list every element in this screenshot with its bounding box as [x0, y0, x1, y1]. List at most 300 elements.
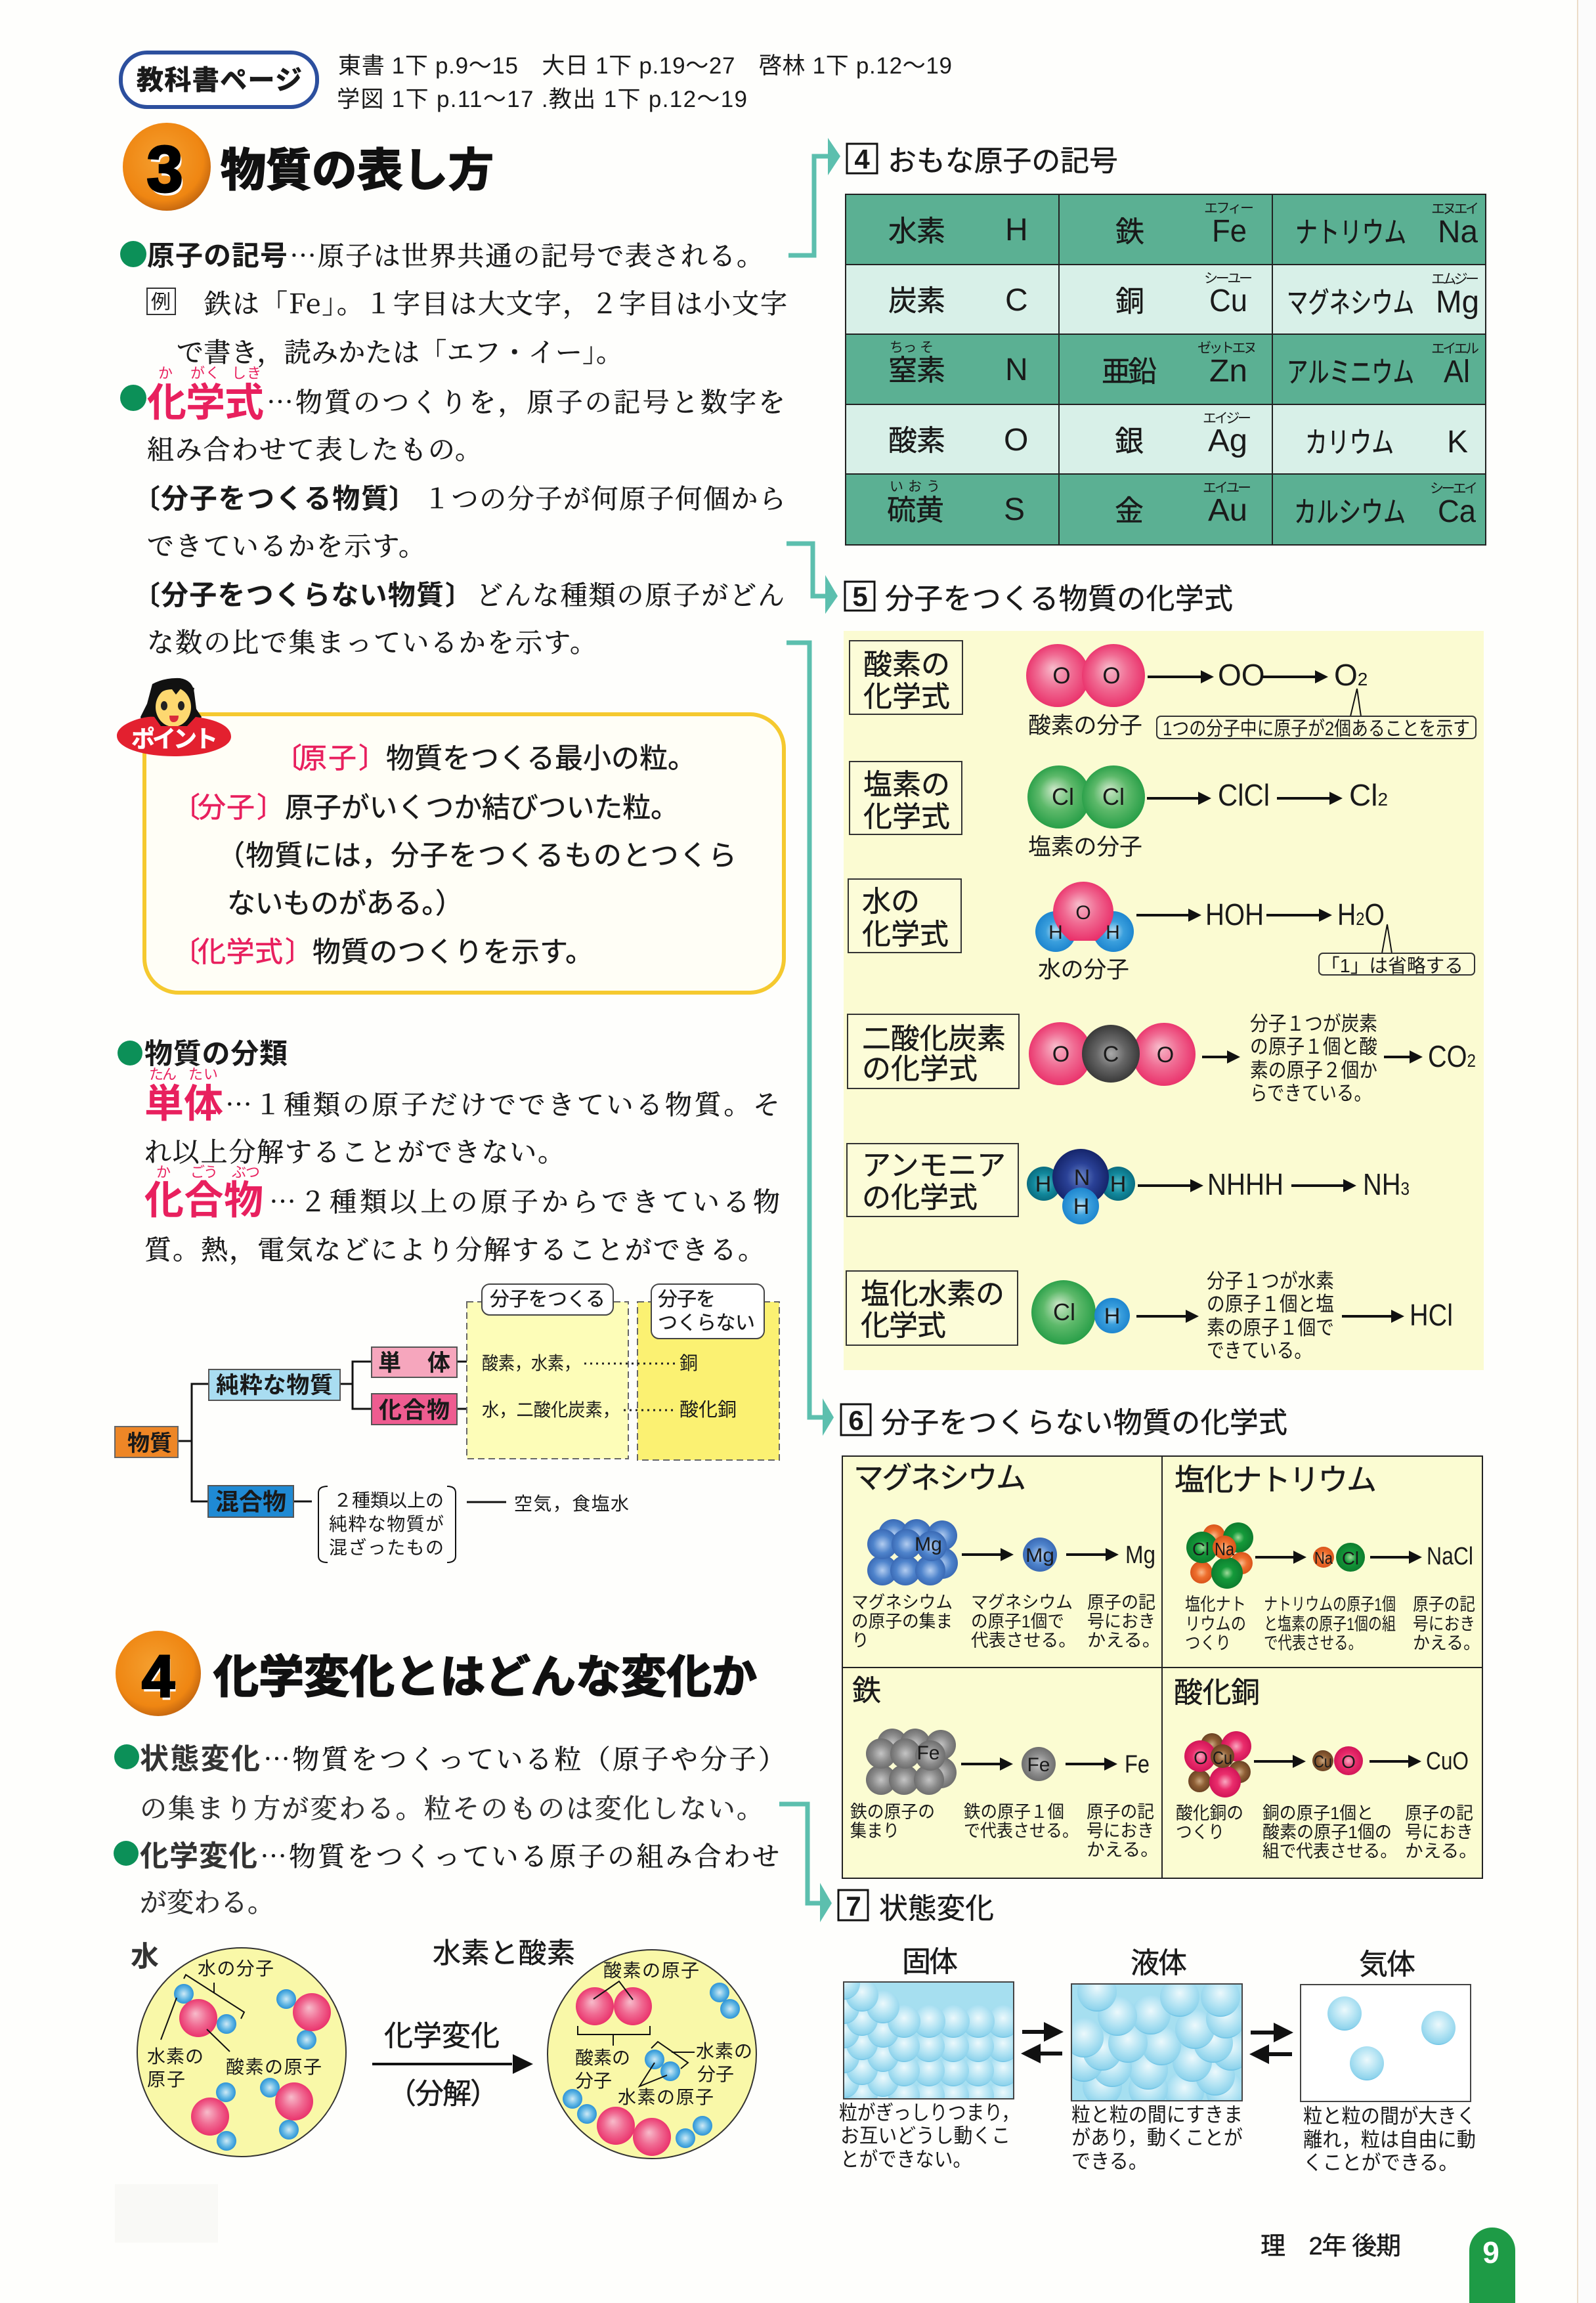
- cell: iron: [850, 1675, 1159, 1860]
- row: hydrogen chloride: 塩化水素の: [861, 1278, 1004, 1310]
- cell: magnesium: 号におき: [1087, 1612, 1155, 1631]
- row: hydrogen chloride: 素の原子１個で: [1207, 1316, 1334, 1339]
- text: chemical formula: 〕: [389, 484, 416, 514]
- row: water: O: [1075, 902, 1091, 924]
- column: non-metals: 酸素: [888, 425, 945, 457]
- heading 7: state change: [838, 1890, 994, 1925]
- text: chemical formula: しき: [232, 365, 261, 381]
- classification tree diagram: 銅: [679, 1353, 698, 1373]
- column: non-metals: H: [1005, 213, 1028, 248]
- arrow: to section 4 table: [788, 138, 840, 255]
- text: classification of matter: 化合物: [144, 1178, 263, 1222]
- box: compound: 化合物: [379, 1398, 450, 1423]
- text: state change and chemical change: が変わる。: [140, 1881, 274, 1920]
- table: atomic symbols: [846, 194, 1486, 545]
- heading 7: state change: 状態変化: [879, 1893, 994, 1925]
- diagram: water circle: 水素の: [147, 2046, 204, 2067]
- diagram: liquid: [1064, 1947, 1251, 2173]
- label: hydrogen and oxygen: 水素と酸素: [433, 1938, 575, 1969]
- box: mixture: 混合物: [215, 1488, 286, 1515]
- cell: sodium chloride: Na: [1215, 1539, 1234, 1559]
- diagram: hydrogen and oxygen circle: [548, 1950, 756, 2159]
- text: classification of matter: か: [156, 1164, 171, 1180]
- column: non-metals: C: [1005, 283, 1028, 318]
- diagram: hydrogen and oxygen circle: 酸素の: [575, 2048, 630, 2068]
- column: metals: Cu: [1209, 284, 1247, 318]
- cell: copper oxide: 組で代表させる。: [1262, 1841, 1397, 1861]
- row: oxygen: O: [1102, 663, 1121, 689]
- row: water: 水の: [862, 886, 920, 918]
- point callout box: 分子: [198, 792, 255, 824]
- cell: copper oxide: 酸化銅の: [1176, 1803, 1243, 1823]
- section 3 heading: 3: [146, 133, 183, 206]
- box: matter: [115, 1427, 178, 1457]
- diagram: solid: お互いどうし動くこ: [840, 2124, 1010, 2147]
- row: water: H: [1106, 922, 1120, 943]
- cell: copper oxide: 号におき: [1405, 1822, 1473, 1842]
- column: metals 2: マグネシウム: [1287, 287, 1414, 319]
- cell: sodium chloride: かえる。: [1413, 1633, 1480, 1653]
- cell: sodium chloride: 塩化ナトリウム: [1175, 1463, 1377, 1497]
- arrows: liquid and gas: [1251, 2033, 1292, 2054]
- cell: magnesium: の原子の集ま: [852, 1612, 953, 1631]
- column: metals 2: Ca: [1438, 494, 1476, 529]
- panel: molecule-forming: [467, 1284, 628, 1459]
- column: metals: Zn: [1209, 354, 1247, 389]
- cell: copper oxide: O: [1194, 1748, 1208, 1768]
- point callout box: 〕: [285, 937, 313, 968]
- text: atom symbols: 鉄は「Fe」。１字目は大文字，２字目は小文字: [204, 282, 787, 321]
- text: atom symbols: 原子の記号: [147, 240, 288, 271]
- text: classification of matter: …２種類以上の原子からできている物: [269, 1180, 780, 1219]
- column: metals: 亜鉛: [1102, 356, 1157, 388]
- text: atom symbols: 例: [151, 291, 171, 313]
- text: chemical formula: [120, 365, 786, 660]
- row: chlorine: [850, 762, 1388, 860]
- column: metals: Fe: [1212, 214, 1247, 249]
- text: atom symbols: [120, 234, 787, 370]
- cell: copper oxide: 酸素の原子1個の: [1262, 1822, 1392, 1842]
- heading 5: formulas of molecular substances: 5: [852, 581, 868, 612]
- icon: point character: ポイント: [131, 725, 218, 752]
- cell: magnesium: マグネシウム: [971, 1593, 1073, 1612]
- text: state change and chemical change: [114, 1738, 785, 1920]
- row: chlorine: Cl2: [1349, 778, 1388, 812]
- text: state change and chemical change: の集まり方が変わる。粒そのものは変化しない。: [140, 1787, 764, 1826]
- column: metals 2: エムジー: [1431, 272, 1479, 287]
- column: metals 2: Al: [1444, 355, 1470, 389]
- cell: sodium chloride: ナトリウムの原子1個: [1264, 1595, 1396, 1614]
- page number tab: [1469, 2228, 1515, 2303]
- panel: molecular substances: [844, 631, 1484, 1370]
- cell: sodium chloride: 原子の記: [1413, 1595, 1475, 1614]
- text: chemical formula: 〔: [133, 580, 160, 611]
- cell: magnesium: Mg: [915, 1534, 942, 1555]
- diagram: solid: とができない。: [840, 2148, 972, 2171]
- diagram: water circle: 水の分子: [198, 1958, 274, 1979]
- point callout box: 物質をつくる最小の粒。: [386, 743, 696, 775]
- row: chlorine: Cl: [1102, 783, 1125, 810]
- section 3 heading: 物質の表し方: [221, 145, 494, 196]
- column: metals 2: K: [1447, 425, 1468, 460]
- cell: iron: 原子の記: [1087, 1802, 1154, 1822]
- text: state change and chemical change: …物質をつくっている粒（原子や分子）: [263, 1738, 785, 1776]
- cell: copper oxide: Cu: [1314, 1752, 1332, 1771]
- row: water: [848, 879, 1475, 983]
- section 4 heading: 4: [143, 1647, 176, 1713]
- column: metals 2: ナトリウム: [1295, 217, 1406, 249]
- diagram: liquid: できる。: [1071, 2150, 1148, 2173]
- column: non-metals: 窒素: [888, 355, 945, 387]
- point callout box: 〔: [172, 937, 200, 968]
- row: carbon dioxide: [848, 1012, 1476, 1105]
- arrow: to section 5: [787, 544, 838, 614]
- text: classification of matter: [118, 1039, 780, 1267]
- cell: iron: で代表させる。: [964, 1821, 1079, 1841]
- cell: magnesium: 代表させる。: [971, 1631, 1076, 1650]
- text: chemical formula: か: [158, 365, 173, 381]
- cell: iron: 鉄の原子の: [850, 1802, 935, 1822]
- arrow: chemical change (decomposition): [372, 2020, 533, 2110]
- diagram: solid: [840, 1947, 1014, 2168]
- column: metals 2: エイエル: [1431, 341, 1479, 356]
- classification tree diagram: [115, 1284, 779, 1562]
- row: hydrogen chloride: 化学式: [861, 1310, 946, 1342]
- diagram: liquid: があり，動くことが: [1071, 2126, 1243, 2149]
- row: oxygen: 化学式: [863, 681, 950, 713]
- row: carbon dioxide: の原子１個と酸: [1250, 1035, 1377, 1058]
- cell: copper oxide: かえる。: [1405, 1841, 1477, 1861]
- text: chemical formula: 化学式: [147, 381, 264, 425]
- column: non-metals: 硫黄: [887, 494, 944, 527]
- classification tree diagram: 酸化銅: [679, 1399, 737, 1421]
- arrow: chemical change (decomposition): （分解）: [387, 2078, 499, 2110]
- callout: 1 is omitted: 「1」は省略する: [1321, 955, 1463, 977]
- arrows: solid and liquid: [1022, 2032, 1062, 2054]
- row: water: H2O: [1337, 897, 1385, 932]
- column: metals 2: アルミニウム: [1287, 356, 1414, 389]
- heading 6: formulas of non-molecular substances: 分子をつくらない物質の化学式: [881, 1407, 1287, 1439]
- row: chlorine: 化学式: [863, 801, 950, 833]
- cell: iron: 集まり: [850, 1821, 899, 1841]
- callout: two atoms in one molecule: [1157, 689, 1476, 740]
- arrow: to section 7: [779, 1804, 832, 1922]
- box: element: 単 体: [378, 1350, 450, 1376]
- cell: copper oxide: [1174, 1677, 1477, 1861]
- point callout box: 化学式: [198, 937, 283, 968]
- column: metals 2: Na: [1438, 215, 1478, 249]
- column: metals: エフィー: [1204, 201, 1254, 216]
- cell: iron: 鉄の原子１個: [964, 1802, 1064, 1822]
- column: metals: 銅: [1115, 286, 1144, 318]
- heading 6: formulas of non-molecular substances: 6: [848, 1405, 864, 1436]
- cell: magnesium: [852, 1461, 1161, 1650]
- text: state change and chemical change: …物質をつくっている原子の組み合わせ: [260, 1835, 779, 1874]
- cell: sodium chloride: Na: [1314, 1548, 1333, 1568]
- diagram: gas: 気体: [1359, 1948, 1415, 1981]
- page number tab: 9: [1482, 2235, 1499, 2270]
- cell: copper oxide: O: [1341, 1752, 1356, 1772]
- column: metals: エイジー: [1203, 411, 1251, 426]
- panel: non-molecule-forming: [637, 1284, 779, 1460]
- row: ammonia: [847, 1144, 1410, 1224]
- row: carbon dioxide: O: [1052, 1042, 1069, 1067]
- box: matter: 物質: [127, 1431, 172, 1456]
- row: ammonia: NH3: [1363, 1167, 1410, 1201]
- text: classification of matter: …１種類の原子だけでできている物質。そ: [225, 1083, 780, 1122]
- panel: molecule-forming: 分子をつくる: [490, 1289, 605, 1310]
- arrow: to section 6: [787, 643, 834, 1436]
- diagram: water circle: 水: [131, 1941, 159, 1973]
- column: metals: 金: [1115, 495, 1144, 527]
- row: oxygen: 酸素の: [863, 649, 950, 681]
- column: non-metals: O: [1004, 423, 1028, 458]
- column: metals: 銀: [1115, 425, 1144, 458]
- row: oxygen: O: [1052, 663, 1071, 689]
- cell: sodium chloride: つくり: [1185, 1633, 1231, 1653]
- text: classification of matter: ごう: [190, 1164, 218, 1180]
- cell: magnesium: Mg: [1125, 1541, 1155, 1569]
- classification tree diagram: 空気，食塩水: [514, 1494, 629, 1514]
- heading 4: main atomic symbols: おもな原子の記号: [888, 145, 1118, 177]
- row: hydrogen chloride: H: [1104, 1304, 1120, 1329]
- point callout box: 〔: [172, 792, 200, 824]
- diagram: hydrogen and oxygen circle: 水素の: [696, 2041, 752, 2061]
- column: metals: Au: [1208, 493, 1247, 528]
- row: carbon dioxide: C: [1103, 1042, 1119, 1067]
- row: ammonia: H: [1073, 1194, 1089, 1219]
- point callout box: （物質には，分子をつくるものとつくら: [217, 840, 737, 872]
- box: pure substance: 純粋な物質: [216, 1373, 333, 1398]
- text: chemical formula: 〕: [445, 580, 472, 611]
- point callout box: 原子がいくつか結びついた粒。: [285, 792, 679, 824]
- column: metals: ゼットエヌ: [1197, 341, 1257, 356]
- text: classification of matter: ぶつ: [232, 1164, 260, 1180]
- row: ammonia: H: [1110, 1172, 1126, 1197]
- cell: sodium chloride: Cl: [1342, 1548, 1359, 1568]
- column: metals: エイユー: [1203, 481, 1251, 496]
- point callout box: [117, 678, 784, 993]
- row: carbon dioxide: らできている。: [1250, 1082, 1371, 1105]
- text: chemical formula: １つの分子が何原子何個から: [423, 477, 786, 516]
- diagram: solid: 固体: [902, 1946, 958, 1978]
- row: ammonia: H: [1035, 1172, 1051, 1197]
- diagram: gas: くことができる。: [1303, 2151, 1458, 2174]
- row: chlorine: 塩素の分子: [1028, 834, 1142, 860]
- section 4 heading: [116, 1631, 757, 1716]
- point callout box: 〕: [358, 743, 387, 775]
- heading 7: state change: 7: [846, 1891, 861, 1922]
- cell: copper oxide: 酸化銅: [1174, 1677, 1260, 1709]
- cell: copper oxide: 原子の記: [1405, 1803, 1473, 1823]
- row: hydrogen chloride: [846, 1270, 1453, 1362]
- diagram: gas: 離れ，粒は自由に動: [1303, 2128, 1476, 2151]
- row: water: 化学式: [862, 918, 949, 951]
- column: non-metals: 炭素: [888, 285, 945, 317]
- row: water: H: [1048, 922, 1063, 943]
- cell: sodium chloride: NaCl: [1427, 1543, 1473, 1570]
- diagram: water circle: 原子: [147, 2069, 185, 2090]
- text: chemical formula: 分子をつくらない物質: [161, 580, 444, 611]
- row: ammonia: NHHH: [1207, 1167, 1283, 1201]
- cell: magnesium: マグネシウム: [852, 1593, 953, 1612]
- row: ammonia: N: [1074, 1165, 1090, 1190]
- point callout box: 〕: [257, 792, 285, 824]
- callout: 1 is omitted: [1319, 924, 1475, 977]
- row: oxygen: OO: [1218, 658, 1265, 692]
- textbook page references: 東書 1下 p.9〜15 大日 1下 p.19〜27 啓林 1下 p.12〜19: [338, 53, 952, 79]
- row: carbon dioxide: 二酸化炭素: [862, 1023, 1006, 1055]
- text: chemical formula: がく: [190, 365, 220, 381]
- diagram: gas: [1301, 1948, 1476, 2174]
- classification tree diagram: 混ざったもの: [329, 1538, 444, 1558]
- row: hydrogen chloride: Cl: [1053, 1299, 1075, 1325]
- column: metals: シーユー: [1204, 271, 1253, 286]
- column: non-metals: いおう: [890, 479, 940, 494]
- diagram: liquid: 液体: [1131, 1947, 1187, 1979]
- cell: sodium chloride: Cl: [1192, 1539, 1209, 1559]
- section 3 heading: [123, 123, 494, 211]
- text: chemical formula: 組み合わせて表したもの。: [147, 428, 482, 467]
- column: metals 2: Mg: [1436, 285, 1479, 320]
- cell: magnesium: 原子の記: [1087, 1593, 1155, 1612]
- cell: sodium chloride: と塩素の原子1個の組: [1264, 1614, 1396, 1634]
- column: non-metals: 水素: [888, 215, 945, 248]
- text: state change and chemical change: 化学変化: [140, 1840, 257, 1872]
- classification tree diagram: 酸素，水素，: [482, 1353, 580, 1373]
- column: non-metals: N: [1005, 353, 1028, 387]
- cell: sodium chloride: リウムの: [1185, 1614, 1246, 1634]
- diagram: liquid: 粒と粒の間にすきま: [1071, 2103, 1243, 2126]
- section 4 heading: 化学変化とはどんな変化か: [213, 1652, 757, 1702]
- row: hydrogen chloride: 分子１つが水素: [1207, 1270, 1334, 1293]
- row: carbon dioxide: O: [1157, 1043, 1174, 1067]
- heading 4: main atomic symbols: 4: [854, 144, 870, 175]
- row: water: HOH: [1205, 897, 1264, 932]
- row: oxygen: O2: [1334, 658, 1368, 692]
- row: chlorine: ClCl: [1218, 778, 1270, 812]
- cell: sodium chloride: [1175, 1463, 1480, 1653]
- row: oxygen: 酸素の分子: [1028, 713, 1142, 739]
- row: carbon dioxide: の化学式: [862, 1053, 978, 1085]
- cell: copper oxide: CuO: [1426, 1748, 1469, 1775]
- box: compound: [372, 1394, 457, 1425]
- text: state change and chemical change: 状態変化: [140, 1743, 260, 1775]
- point callout box: 〔: [274, 743, 302, 775]
- row: water: 水の分子: [1038, 957, 1129, 983]
- callout: two atoms in one molecule: 1つの分子中に原子が2個あることを示す: [1163, 718, 1470, 740]
- text: classification of matter: 質。熱，電気などにより分解することができる。: [144, 1228, 765, 1267]
- section 3 heading: 3: [148, 136, 185, 209]
- cell: iron: 鉄: [852, 1675, 881, 1707]
- textbook page references: 学図 1下 p.11〜17 .教出 1下 p.12〜19: [337, 87, 747, 112]
- row: carbon dioxide: 分子１つが炭素: [1250, 1012, 1377, 1035]
- column: metals 2: カルシウム: [1294, 496, 1406, 528]
- diagram: water circle: 酸素の原子: [226, 2057, 322, 2077]
- text: chemical formula: どんな種類の原子がどん: [476, 574, 785, 613]
- point callout box: 原子: [299, 743, 356, 775]
- text: atom symbols: …原子は世界共通の記号で表される。: [290, 234, 764, 273]
- cell: iron: Fe: [1027, 1754, 1050, 1776]
- diagram: gas: 粒と粒の間が大きく: [1303, 2105, 1476, 2128]
- row: hydrogen chloride: の原子１個と塩: [1207, 1293, 1334, 1316]
- row: carbon dioxide: CO2: [1428, 1039, 1476, 1073]
- row: oxygen: [850, 641, 1476, 740]
- column: metals: Ag: [1208, 423, 1247, 458]
- row: ammonia: アンモニア: [862, 1150, 1006, 1182]
- cell: magnesium: の原子1個で: [971, 1612, 1064, 1631]
- footer label: 理 2年 後期: [1261, 2233, 1401, 2260]
- row: ammonia: の化学式: [862, 1182, 978, 1214]
- column: metals 2: エヌエイ: [1431, 202, 1479, 217]
- text: chemical formula: できているかを示す。: [147, 525, 425, 563]
- text: chemical formula: 分子をつくる物質: [161, 483, 389, 514]
- text: classification of matter: たい: [188, 1066, 218, 1083]
- panel: non-molecule-forming: 分子を: [658, 1289, 716, 1310]
- cell: sodium chloride: で代表させる。: [1264, 1633, 1362, 1653]
- cell: iron: かえる。: [1087, 1840, 1159, 1860]
- cell: copper oxide: 銅の原子1個と: [1262, 1803, 1373, 1823]
- classification tree diagram: 純粋な物質が: [329, 1514, 444, 1534]
- column: non-metals: S: [1004, 492, 1025, 527]
- cell: magnesium: かえる。: [1087, 1631, 1161, 1650]
- cell: magnesium: り: [852, 1631, 869, 1650]
- diagram: hydrogen and oxygen circle: 分子: [697, 2064, 734, 2084]
- diagram: solid: 粒がぎっしりつまり，: [839, 2101, 1020, 2124]
- textbook page badge: [121, 53, 317, 107]
- cell: iron: Fe: [917, 1742, 940, 1764]
- column: metals 2: シーエイ: [1430, 481, 1478, 496]
- classification tree diagram: ２種類以上の: [334, 1490, 444, 1511]
- heading 5: formulas of molecular substances: 分子をつくる物質の化学式: [885, 583, 1233, 615]
- textbook page references: [337, 53, 952, 112]
- section 4 heading: 4: [142, 1644, 175, 1710]
- text: classification of matter: れ以上分解することができない。: [144, 1130, 565, 1169]
- cell: copper oxide: Cu: [1213, 1748, 1232, 1768]
- arrow: chemical change (decomposition): 化学変化: [384, 2020, 500, 2052]
- row: hydrogen chloride: できている。: [1207, 1339, 1312, 1362]
- diagram: hydrogen and oxygen circle: 分子: [575, 2071, 612, 2091]
- classification tree diagram: 水，二酸化炭素，: [482, 1400, 620, 1420]
- textbook page badge: 教科書ページ: [137, 65, 302, 95]
- row: hydrogen chloride: HCl: [1410, 1298, 1453, 1332]
- text: chemical formula: …物質のつくりを，原子の記号と数字を: [267, 381, 785, 420]
- cell: sodium chloride: 号におき: [1413, 1614, 1475, 1634]
- cell: copper oxide: つくり: [1176, 1822, 1224, 1842]
- text: classification of matter: 物質の分類: [144, 1039, 288, 1070]
- row: carbon dioxide: 素の原子２個か: [1250, 1059, 1377, 1082]
- column: metals: 鉄: [1115, 216, 1144, 248]
- text: chemical formula: な数の比で集まっているかを示す。: [147, 621, 597, 660]
- text: classification of matter: 単体: [144, 1082, 223, 1126]
- icon: point character: [117, 678, 231, 756]
- panel: non-molecule-forming: つくらない: [658, 1312, 755, 1334]
- column: metals 2: カリウム: [1305, 427, 1394, 459]
- column: non-metals: ちっ そ: [890, 340, 934, 355]
- column: non-metals: [887, 213, 1028, 527]
- cell: magnesium: Mg: [1025, 1545, 1054, 1566]
- text: atom symbols: で書き，読みかたは「エフ・イー」。: [177, 331, 623, 370]
- diagram: water circle: [131, 1941, 346, 2157]
- row: chlorine: 塩素の: [863, 769, 950, 801]
- cell: sodium chloride: 塩化ナト: [1185, 1595, 1246, 1614]
- cell: iron: Fe: [1125, 1751, 1150, 1778]
- point callout box: 物質のつくりを示す。: [313, 937, 593, 968]
- panel: non-molecular substances grid: [842, 1456, 1482, 1878]
- row: chlorine: Cl: [1052, 783, 1074, 810]
- point callout box: ないものがある。）: [227, 888, 464, 920]
- text: chemical formula: 〔: [133, 484, 160, 514]
